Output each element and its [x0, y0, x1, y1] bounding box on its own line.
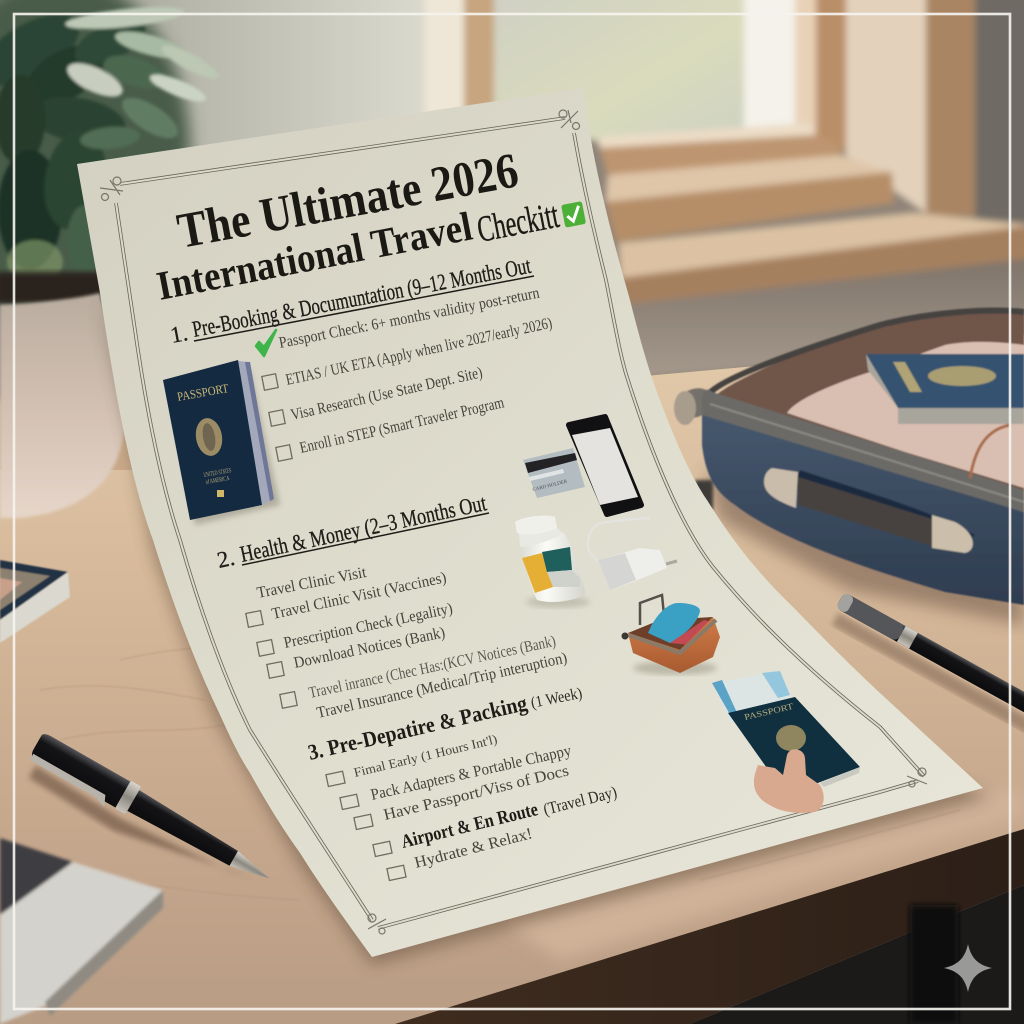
- pen on the right: [827, 592, 1024, 737]
- section 1: pre-booking and documentation: Passport Check: 6+ months validity post-return: [278, 285, 541, 352]
- section 3: pre-departure and packing: Have Passport/Viss of Docs: [382, 762, 571, 824]
- checklist paper: [77, 88, 983, 957]
- passport in suitcase: [866, 354, 1024, 424]
- illustration: passport book: of AMERICA: [205, 475, 230, 486]
- illustration: bank card and smartphone: CARD HOLDER: [532, 479, 568, 493]
- title: The Ultimate 2026: [173, 141, 522, 259]
- section 1: pre-booking and documentation: 1.: [168, 320, 190, 348]
- section 3: pre-departure and packing: (1 Week): [529, 685, 584, 712]
- section 3: pre-departure and packing: Hydrate & Relax!: [413, 825, 534, 872]
- black ballpoint pen: [18, 731, 278, 910]
- section 2: health and money: [215, 490, 569, 722]
- paper shadow: [100, 300, 990, 965]
- corner ornaments: [100, 110, 927, 934]
- section 2: health and money: Travel inrance (Chec Has:(KCV Notices (Bank): [307, 633, 557, 702]
- title: International Travel: [153, 203, 476, 309]
- illustration: hand holding passport and ticket: [712, 671, 860, 813]
- icon: green check mark: [256, 330, 276, 356]
- book at the bottom left: [0, 838, 163, 1024]
- section 3: pre-departure and packing: 3. Pre-Depatire & Packing: [306, 690, 529, 765]
- illustration: charger and cable: [588, 518, 677, 590]
- section 2: health and money: Travel Insurance (Medical/Trip interuption): [315, 649, 569, 722]
- section 2: health and money: Travel Clinic Visit (Vaccines): [270, 569, 448, 623]
- illustration: hand holding passport and ticket: PASSPORT: [743, 701, 795, 722]
- title: Checkitt: [474, 195, 563, 251]
- title: [153, 141, 586, 309]
- section 1: pre-booking and documentation: [168, 253, 554, 461]
- illustration: passport book: UNITED STATES: [203, 467, 232, 479]
- potted plant: [0, 0, 222, 518]
- section 3: pre-departure and packing: Pack Adapters & Portable Chappy: [369, 742, 573, 804]
- background: wooden desk: [0, 335, 1024, 1024]
- suitcase handle bracket: [764, 468, 798, 508]
- book stack on the left: [0, 560, 70, 643]
- section 1: pre-booking and documentation: Visa Research (Use State Dept. Site): [289, 364, 484, 424]
- luggage strap: [970, 425, 1010, 478]
- section 3: pre-departure and packing: (Travel Day): [541, 782, 619, 819]
- icon: green check emoji: [561, 201, 586, 228]
- icon: sparkle watermark: [944, 944, 992, 992]
- section 3: pre-departure and packing: Fimal Early (1 Hours Int'l): [352, 731, 499, 780]
- illustration: medicine bottle: [515, 516, 590, 608]
- illustration: bank card and smartphone: [523, 417, 641, 514]
- section 2: health and money: Download Notices (Bank): [292, 624, 447, 672]
- section 2: health and money: Prescription Check (Legality): [282, 600, 454, 652]
- section 1: pre-booking and documentation: Enroll in STEP (Smart Traveler Program: [298, 394, 506, 457]
- paper double border: [116, 118, 924, 928]
- section 1: pre-booking and documentation: Pre-Booking & Documuntation (9–12 Months Out: [190, 253, 533, 342]
- background: window, wall and sill: [0, 0, 1024, 400]
- section 2: health and money: Health & Money (2–3 Months Out: [238, 490, 489, 567]
- section 2: health and money: Travel Clinic Visit: [256, 564, 368, 602]
- section 2: health and money: 2.: [215, 545, 237, 573]
- illustration: passport book: [163, 360, 280, 525]
- section 1: pre-booking and documentation: ETIAS / UK ETA (Apply when live 2027/early 2026): [284, 315, 554, 389]
- section 3: pre-departure and packing: [306, 685, 619, 881]
- illustration: passport book: PASSPORT: [176, 381, 230, 404]
- illustration: small packed suitcase: [622, 595, 720, 675]
- section 3: pre-departure and packing: Airport & En Route: [399, 799, 540, 853]
- open suitcase: [673, 311, 1024, 625]
